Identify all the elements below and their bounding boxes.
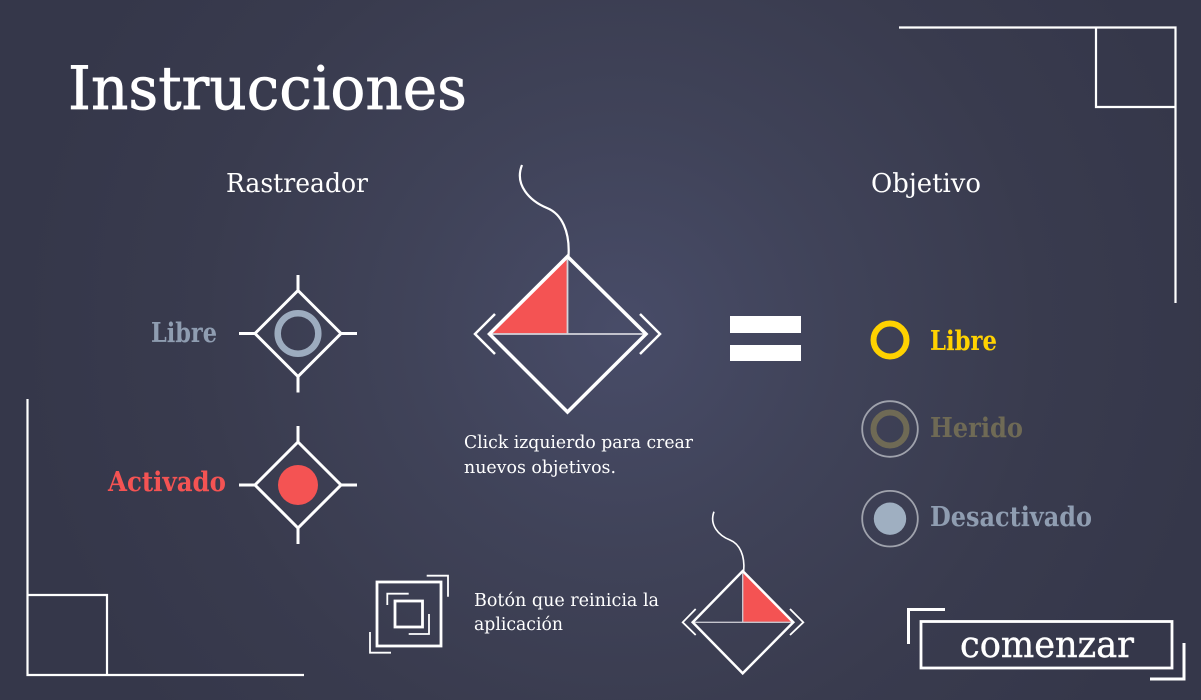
corner frame: top right (899, 28, 1176, 303)
tracker activated state (107, 426, 357, 544)
text: left click instruction: nuevos objetivos. (464, 457, 616, 478)
label: Libre: Libre (151, 318, 217, 349)
icon: activated tracker (239, 426, 357, 544)
text: reset description: aplicación (474, 615, 563, 635)
target wounded state (862, 401, 1023, 457)
label: Herido: Herido (930, 413, 1023, 444)
icon: wounded target (862, 401, 918, 457)
heading: Rastreador: Rastreador (226, 169, 369, 199)
text: reset description: Botón que reinicia la (474, 591, 659, 611)
title: Instrucciones (68, 54, 467, 124)
label: Desactivado: Desactivado (930, 502, 1092, 533)
target free state (874, 324, 997, 357)
target deactivated state (862, 491, 1092, 546)
label: Activado: Activado (107, 467, 226, 498)
icon: yellow ring (874, 324, 906, 356)
icon: deactivated target (862, 491, 918, 546)
text: reset description (474, 591, 659, 635)
corner frame: bottom left (28, 399, 304, 675)
text: left click instruction: Click izquierdo para crear (464, 432, 693, 453)
icon: free tracker (239, 275, 357, 392)
icon: mouse right click (683, 512, 803, 673)
button label: comenzar (960, 625, 1135, 666)
icon: reset button (370, 576, 448, 653)
text: left click instruction (464, 432, 693, 478)
tracker free state (151, 275, 357, 392)
label: Libre: Libre (930, 326, 997, 357)
icon: equals sign (730, 316, 801, 361)
icon: mouse left click (475, 165, 660, 412)
button: comenzar (908, 610, 1184, 679)
heading: Objetivo: Objetivo (871, 169, 981, 199)
